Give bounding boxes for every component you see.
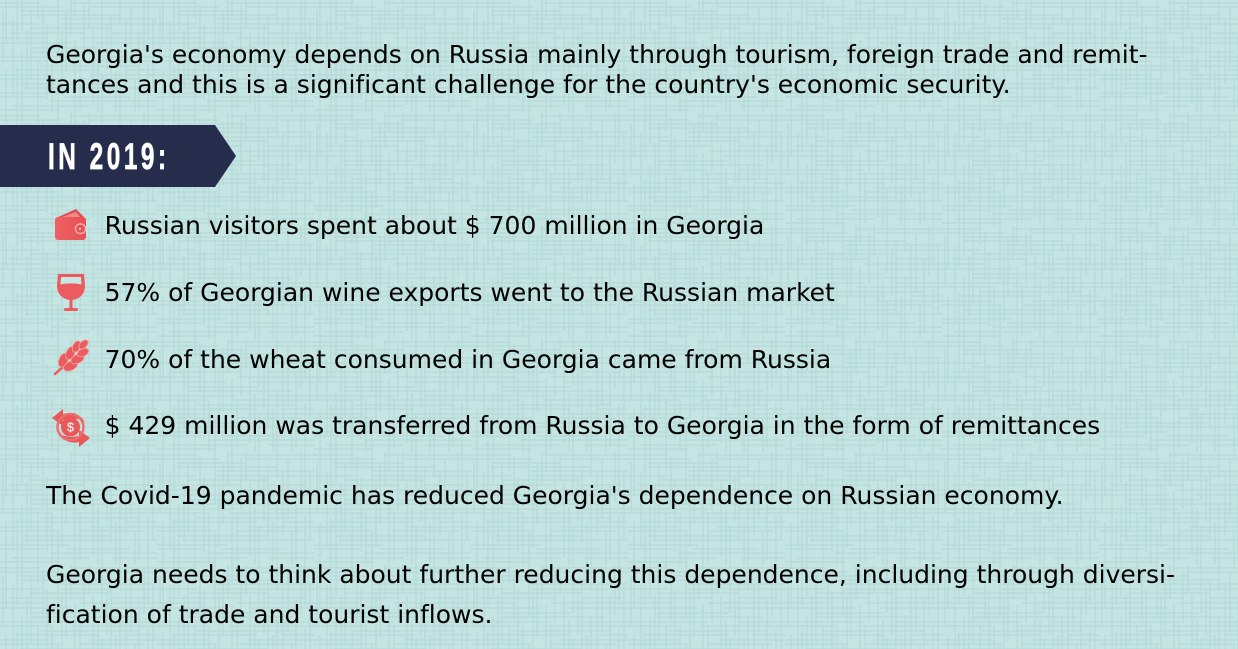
icon: wine glass bbox=[57, 274, 85, 311]
icon: money transfer: $ bbox=[67, 420, 75, 434]
banner: in 2019: IN 2019: bbox=[48, 136, 170, 177]
list item: visitors: Russian visitors spent about $ 700 million in Georgia bbox=[105, 211, 764, 240]
intro paragraph: tances and this is a significant challenge for the country's economic security. bbox=[46, 70, 1011, 99]
icon: money transfer bbox=[52, 409, 90, 447]
banner: in 2019 bbox=[0, 125, 236, 187]
icon: wheat bbox=[54, 340, 89, 376]
list item: remittances: $ 429 million was transferred from Russia to Georgia in the form of remittances bbox=[105, 411, 1100, 440]
recommendation paragraph: fication of trade and tourist inflows. bbox=[46, 600, 492, 629]
list item: wine: 57% of Georgian wine exports went to the Russian market bbox=[105, 278, 835, 307]
list item: wheat: 70% of the wheat consumed in Georgia came from Russia bbox=[105, 345, 831, 374]
intro paragraph: Georgia's economy depends on Russia mainly through tourism, foreign trade and remit- bbox=[46, 40, 1148, 69]
recommendation paragraph: Georgia needs to think about further reducing this dependence, including through diversi- bbox=[46, 560, 1175, 589]
icon: wallet bbox=[55, 209, 86, 240]
recommendation paragraph bbox=[46, 560, 1175, 629]
covid statement: The Covid-19 pandemic has reduced Georgia's dependence on Russian economy. bbox=[46, 481, 1064, 510]
intro paragraph bbox=[46, 40, 1148, 99]
